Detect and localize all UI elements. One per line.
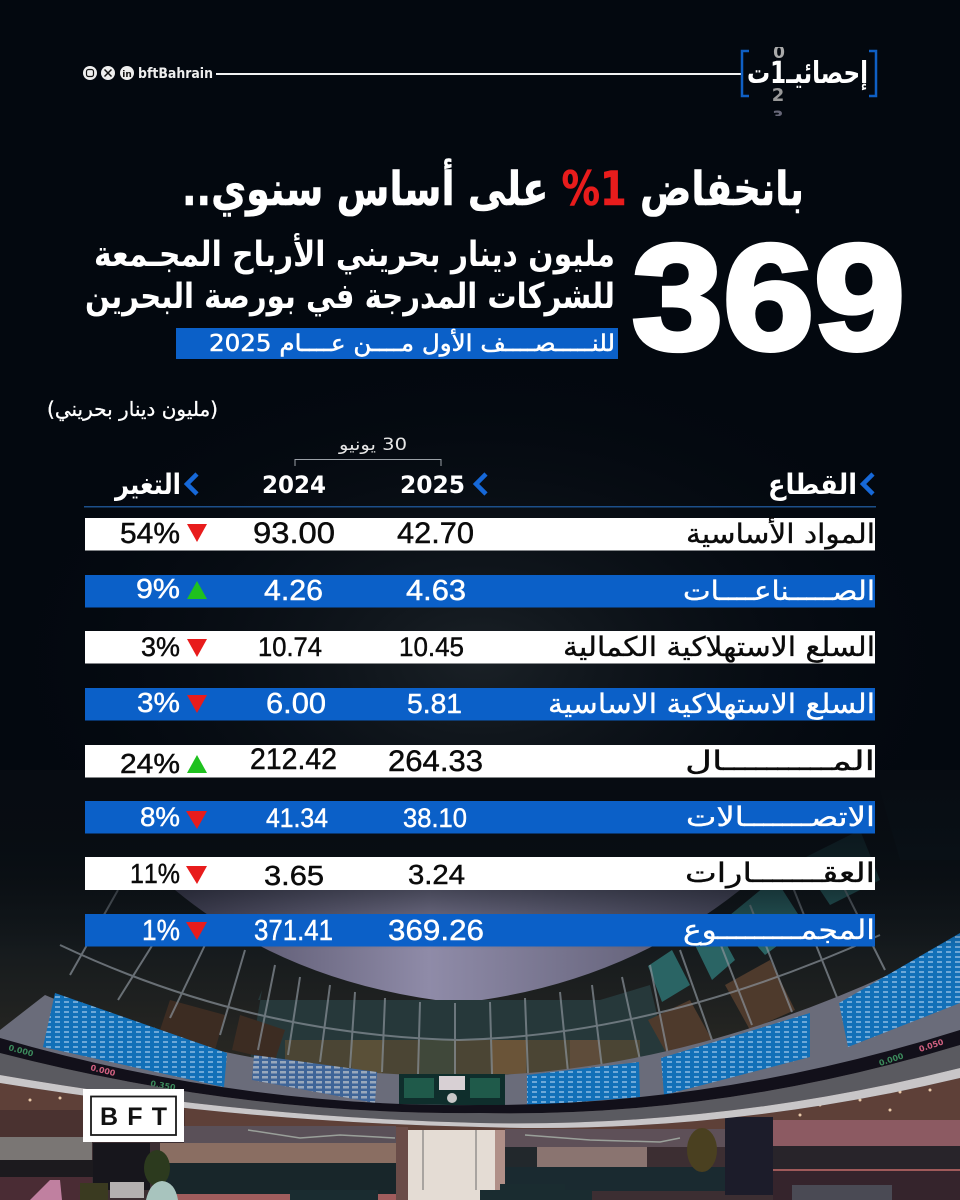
subtitle [85, 232, 615, 317]
logo: إحصائيات counter: 2 [772, 85, 784, 106]
row: materials: المواد الأساسية [686, 516, 875, 550]
logo: إحصائيات counter: 0 [773, 43, 785, 63]
ticker band: 0.050 [918, 1037, 945, 1054]
row: financials: المــــــــــال [685, 746, 875, 777]
column: 2024: 2024 [262, 471, 326, 499]
date bracket: 30 يونيو [338, 435, 407, 455]
table header [84, 468, 876, 508]
ring duct [0, 1045, 960, 1123]
row: industrials: 4.63 [406, 575, 466, 607]
left and right lit panes [160, 1000, 285, 1060]
icon: instagram [83, 66, 97, 80]
row: consumer staples [85, 687, 875, 720]
logo: إحصائيات counter: 3 [772, 107, 784, 126]
logo: إحصائيات counter: إحصائيـ1ت [747, 56, 868, 91]
white ring strip [0, 1068, 960, 1128]
dark fade [0, 770, 960, 950]
row: consumer staples: 3% [137, 687, 180, 718]
row: industrials: 9% [136, 573, 180, 604]
screen 1 [43, 993, 227, 1087]
row: financials: 24% [120, 748, 180, 779]
date bracket [295, 435, 441, 466]
teal windows upper right [648, 830, 880, 1002]
right wall [773, 1120, 960, 1146]
big number: 369 [632, 213, 905, 381]
subtitle: مليون دينار بحريني الأرباح المجـمعة [94, 232, 615, 275]
row: total: 1% [142, 915, 180, 947]
row: telecoms: 41.34 [266, 803, 328, 833]
screen 2 [252, 1055, 377, 1103]
row: telecoms: الاتصـــــــالات [686, 802, 875, 833]
row: real estate: 3.24 [408, 859, 465, 890]
icon: X [101, 66, 115, 80]
row: financials [85, 743, 875, 779]
row: consumer discretionary [85, 631, 875, 664]
counters [165, 1163, 397, 1194]
row: industrials: الصـــــناعــــات [683, 576, 875, 607]
logo: إحصائيات counter [740, 47, 878, 116]
screen right 2 [527, 1062, 640, 1106]
plants and figures [687, 1128, 717, 1172]
row: telecoms: 38.10 [403, 803, 467, 833]
column: 2025: 2025 [400, 471, 465, 499]
column: change: التغير [113, 468, 181, 501]
period band: للنـــــصــــف الأول مــــن عــــام 2025 [209, 329, 615, 357]
row: real estate: العقـــــــارات [685, 858, 875, 889]
screen right 3 [661, 1013, 810, 1095]
row: industrials [85, 573, 875, 608]
soffit [0, 1078, 960, 1130]
row: real estate [85, 857, 875, 891]
handle: bftBahrain [138, 66, 213, 82]
row: real estate: 3.65 [264, 860, 324, 891]
row: materials: 93.00 [253, 517, 335, 550]
row: financials: 264.33 [388, 745, 483, 778]
screen center [399, 1074, 505, 1106]
ceiling bowl [175, 890, 740, 1003]
photo: Bahrain bourse trading hall [0, 770, 960, 1200]
row: financials: 212.42 [250, 743, 337, 776]
center door [396, 1127, 408, 1200]
header: social handle and rule [83, 66, 742, 82]
row: real estate: 11% [130, 858, 180, 889]
ticker band: 0.000 [7, 1043, 35, 1059]
icon: linkedin: in [122, 70, 132, 80]
graph band [184, 1126, 396, 1144]
row: materials: 42.70 [397, 517, 474, 550]
icon: linkedin [120, 66, 134, 80]
ticker band [0, 1030, 960, 1113]
row: consumer discretionary: 10.45 [399, 632, 464, 662]
row: materials [85, 516, 875, 550]
ticker band: 0.000 [878, 1051, 905, 1068]
row: consumer discretionary: 3% [141, 632, 180, 662]
ticker band: 0.000 [90, 1063, 117, 1078]
row: consumer staples: 5.81 [407, 688, 462, 719]
row: total: 371.41 [254, 915, 333, 947]
fascia behind screens [0, 940, 960, 1110]
row: consumer discretionary: 10.74 [258, 632, 322, 662]
row: consumer staples: 6.00 [266, 688, 326, 720]
row: consumer staples: السلع الاستهلاكية الاساسية [548, 689, 875, 720]
unit note: (مليون دينار بحريني) [47, 397, 218, 422]
soffit lights [28, 1088, 932, 1116]
row: total: 369.26 [388, 915, 484, 947]
logo: BFT: BFT [100, 1103, 167, 1131]
lobby bands left [0, 1110, 185, 1137]
row: telecoms [85, 801, 875, 834]
row: telecoms: 8% [140, 802, 180, 832]
row: total [85, 914, 875, 947]
row: industrials: 4.26 [264, 575, 323, 607]
seating [290, 1184, 592, 1200]
ticker band: 0.350 [150, 1079, 177, 1092]
row: consumer discretionary: السلع الاستهلاكية الكمالية [563, 632, 875, 663]
title: بانخفاض 1% على أساس سنوي.. [182, 158, 804, 217]
logo: BFT [83, 1089, 184, 1142]
columns [725, 1117, 773, 1195]
column: sector: القطاع [768, 468, 857, 501]
subtitle: للشركات المدرجة في بورصة البحرين [85, 277, 615, 317]
row: total: المجمـــــــــوع [683, 915, 875, 946]
window mullions [60, 860, 885, 1074]
lobby base [0, 1075, 960, 1200]
teller windows [160, 1143, 396, 1163]
center window panes [250, 985, 668, 1076]
row: materials: 54% [120, 518, 180, 550]
screen right 4 [839, 933, 960, 1047]
